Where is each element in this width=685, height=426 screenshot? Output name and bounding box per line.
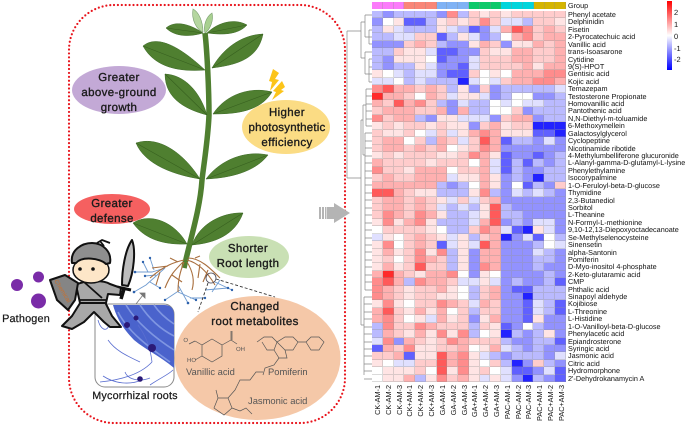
heatmap metabolite labels: 4-Methylumbelliferone glucuronide	[568, 151, 679, 160]
plant stem and leaves	[133, 9, 272, 268]
heatmap metabolite labels: alpha-Santonin	[568, 248, 617, 256]
molecule: vanillic acid: O	[183, 337, 188, 344]
heatmap metabolite labels: Kojibiose	[568, 299, 597, 308]
heatmap metabolite labels: Temazepam	[568, 84, 608, 93]
heatmap metabolite labels: CMP	[568, 277, 584, 286]
heatmap sample labels: PAC-AM-3	[524, 385, 533, 419]
heatmap sample labels: PAC+AM-1	[535, 385, 544, 421]
heatmap sample labels: GA-AM-1	[438, 385, 447, 415]
heatmap metabolite labels: Delphinidin	[568, 17, 604, 26]
dashed zoom lines to metabolites	[198, 273, 275, 312]
benefit: greater defense: Greater	[91, 198, 133, 210]
heatmap sample labels	[373, 385, 566, 421]
heatmap metabolite labels: Hydromorphone	[568, 366, 620, 375]
heatmap metabolite labels: 2,3-Butanediol	[568, 196, 615, 205]
benefit: greater defense	[74, 194, 150, 225]
molecule: jasmonic acid	[214, 372, 307, 415]
benefit: shorter root length: Shorter	[228, 243, 268, 255]
icon: warrior with shield and sword	[50, 240, 134, 329]
colour scale legend: 0	[674, 32, 678, 41]
heatmap metabolite labels: Vanillic acid	[568, 40, 606, 49]
heatmap metabolite labels: L-Histidine	[568, 314, 602, 323]
heatmap metabolite labels: L-Alanyl-gamma-D-glutamyl-L-lysine	[568, 158, 685, 167]
heatmap group colour bar	[372, 2, 566, 9]
heatmap metabolite labels: Cyclopeptine	[568, 136, 610, 145]
heatmap metabolite labels: Syringic acid	[568, 344, 609, 353]
heatmap dendrogram	[347, 15, 372, 379]
colour scale legend	[667, 1, 681, 70]
heatmap sample labels: CK+AM-1	[405, 385, 414, 417]
label: pathogen: Pathogen	[2, 313, 50, 325]
heatmap metabolite labels: Epiandrosterone	[568, 337, 621, 346]
heatmap sample labels: PAC+AM-2	[546, 385, 555, 421]
heatmap metabolite labels: Phenyl acetate	[568, 10, 616, 19]
heatmap metabolite labels: Thymidine	[568, 188, 601, 197]
heatmap metabolite labels: Homovanillic acid	[568, 99, 624, 108]
heatmap metabolite labels: 9(S)-HPOT	[568, 62, 604, 71]
heatmap metabolite labels: Kojic acid	[568, 77, 599, 86]
panel: changed root metabolites	[174, 296, 340, 420]
heatmap metabolite labels: 2-Pyrocatechuic acid	[568, 32, 635, 41]
heatmap sample labels: PAC-AM-2	[514, 385, 523, 419]
heatmap metabolite labels	[568, 10, 685, 383]
label: chemical on shield: Chemical	[52, 278, 72, 304]
heatmap metabolite labels: Phthalic acid	[568, 285, 609, 294]
benefit: above-ground growth: Greater	[98, 72, 140, 84]
colour scale legend: -2	[674, 55, 681, 64]
benefit: shorter root length	[209, 236, 289, 278]
benefit: photosynthetic efficiency	[242, 100, 330, 154]
inset: mycorrhizal roots photo	[95, 304, 174, 387]
heatmap metabolite labels: Fisetin	[568, 25, 589, 34]
plant roots	[150, 256, 220, 292]
heatmap metabolite labels: Isocorypalmine	[568, 173, 617, 182]
panel: changed root metabolites: Changed	[230, 301, 280, 313]
red dotted rounded border	[69, 5, 345, 423]
heatmap metabolite labels: Se-Methylselenocysteine	[568, 233, 649, 242]
heatmap metabolite labels: D-Myo-inositol 4-phosphate	[568, 262, 657, 271]
benefit: photosynthetic efficiency: efficiency	[261, 137, 313, 149]
heatmap metabolite labels: Nicotinamide ribotide	[568, 144, 636, 153]
heatmap metabolite labels: Phenylethylamine	[568, 166, 625, 175]
heatmap metabolite labels: Pomiferin	[568, 255, 599, 264]
heatmap metabolite labels: Pantothenic acid	[568, 106, 622, 115]
benefit: photosynthetic efficiency: Higher	[269, 107, 305, 119]
heatmap sample labels: GA-AM-2	[449, 385, 458, 415]
heatmap metabolite labels: Galactosylglycerol	[568, 129, 627, 138]
heatmap sample labels: GA+AM-3	[492, 385, 501, 417]
benefit: above-ground growth	[72, 66, 166, 114]
heatmap metabolite labels: L-Threonine	[568, 307, 607, 316]
heatmap metabolite labels: 6-Methoxymellein	[568, 121, 625, 130]
colour scale legend: 2	[674, 8, 678, 17]
colour scale legend: -1	[674, 44, 681, 53]
heatmap metabolite labels: N,N-Diethyl-m-toluamide	[568, 114, 647, 123]
panel: changed root metabolites: root metabolites	[211, 316, 299, 328]
molecule: vanillic acid: OH	[236, 346, 245, 353]
heatmap: metabolite abundance	[372, 11, 566, 382]
heatmap metabolite labels: 1-O-Feruloyl-beta-D-glucose	[568, 181, 660, 190]
heatmap sample labels: CK-AM-1	[373, 385, 382, 415]
heatmap metabolite labels: Cytidine	[568, 55, 594, 64]
label: group: Group	[568, 1, 588, 10]
heatmap metabolite labels: Sinensetin	[568, 240, 602, 249]
benefit: above-ground growth: above-ground	[81, 87, 157, 99]
benefit: shorter root length: Root length	[217, 258, 279, 270]
heatmap sample labels: PAC+AM-3	[557, 385, 566, 421]
heatmap sample labels: GA+AM-2	[481, 385, 490, 417]
arrow: inset to roots	[136, 293, 145, 304]
icon: lightning bolts	[269, 69, 285, 100]
colour scale legend: 1	[674, 20, 678, 29]
heatmap metabolite labels: Gentisic acid	[568, 69, 610, 78]
arrow: grey to heatmap	[319, 203, 350, 223]
heatmap sample labels: CK-AM-3	[395, 385, 404, 415]
heatmap sample labels: GA+AM-1	[470, 385, 479, 417]
heatmap metabolite labels: 2-Keto-glutaramic acid	[568, 270, 641, 279]
heatmap metabolite labels: Jasmonic acid	[568, 351, 614, 360]
icon: pathogen spores	[11, 272, 46, 308]
mycorrhizal hyphae	[133, 257, 233, 304]
molecule: vanillic acid: HO	[187, 357, 196, 364]
heatmap metabolite labels: N-Formyl-L-methionine	[568, 218, 642, 227]
molecule: vanillic acid	[183, 331, 245, 377]
heatmap metabolite labels: L-Theanine	[568, 210, 605, 219]
heatmap sample labels: PAC-AM-1	[503, 385, 512, 419]
benefit: photosynthetic efficiency: photosynthetic	[249, 122, 326, 134]
heatmap sample labels: CK-AM-2	[384, 385, 393, 415]
molecule: pomiferin	[257, 337, 324, 377]
molecule: jasmonic acid: Jasmonic acid	[248, 395, 307, 406]
benefit: greater defense: defense	[90, 213, 134, 225]
heatmap metabolite labels: 2'-Dehydrokanamycin A	[568, 374, 644, 383]
heatmap sample labels: CK+AM-2	[416, 385, 425, 417]
heatmap metabolite labels: Citric acid	[568, 359, 600, 368]
molecule: pomiferin: Pomiferin	[268, 366, 308, 377]
heatmap metabolite labels: trans-Isoasarone	[568, 47, 622, 56]
benefit: above-ground growth: growth	[101, 102, 137, 114]
heatmap sample labels: GA-AM-3	[460, 385, 469, 415]
heatmap metabolite labels: Testosterone Propionate	[568, 92, 647, 101]
heatmap metabolite labels: 9,10-12,13-Diepoxyoctadecanoate	[568, 225, 679, 234]
molecule: vanillic acid: Vanillic acid	[186, 366, 235, 377]
heatmap metabolite labels: Sinapoyl aldehyde	[568, 292, 627, 301]
heatmap metabolite labels: Sorbitol	[568, 203, 593, 212]
label: mycorrhizal roots: Mycorrhizal roots	[92, 390, 178, 402]
heatmap sample labels: CK+AM-3	[427, 385, 436, 417]
heatmap metabolite labels: 1-O-Vanilloyl-beta-D-glucose	[568, 322, 661, 331]
heatmap metabolite labels: Phenylacetic acid	[568, 329, 624, 338]
